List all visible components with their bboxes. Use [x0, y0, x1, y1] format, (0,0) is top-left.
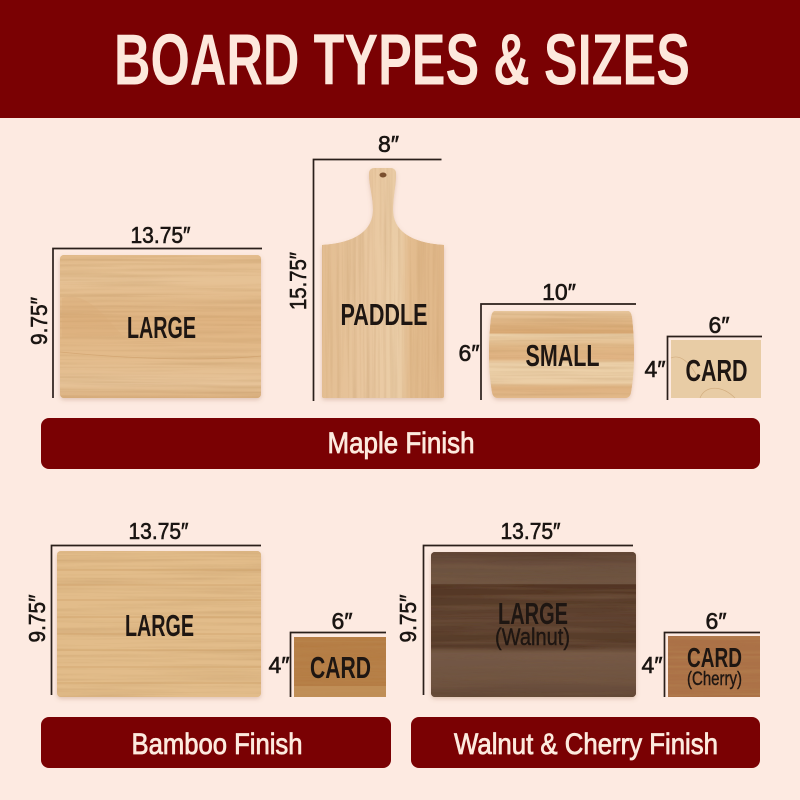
dimension: card width: 6″ — [709, 312, 729, 338]
title banner — [0, 0, 800, 118]
label: paddle: PADDLE — [340, 297, 428, 332]
board: maple small — [489, 311, 634, 398]
dimension: large width: 13.75″ — [130, 222, 190, 248]
banner: maple finish: Maple Finish — [328, 427, 474, 460]
label: card: CARD — [686, 353, 748, 388]
dimension: paddle width — [314, 131, 442, 401]
dimension: card height: 4″ — [645, 356, 665, 382]
label: large walnut: LARGE — [498, 596, 568, 631]
dimension: large height: 9.75″ — [26, 297, 52, 345]
dimension: large width: 13.75″ — [128, 518, 188, 544]
dimension: walnut width: 13.75″ — [500, 518, 560, 544]
dimension: cherry width — [664, 608, 760, 697]
dimension: paddle width: 8″ — [378, 131, 399, 157]
dimension: card width: 6″ — [332, 608, 352, 634]
dimension: paddle height: 15.75″ — [285, 252, 311, 310]
dimension: walnut height: 9.75″ — [395, 594, 421, 642]
dimension: cherry height: 4″ — [642, 652, 662, 678]
dimension: walnut width — [424, 518, 633, 695]
panel: bamboo finish boards — [24, 518, 386, 697]
dimension: small width — [481, 279, 636, 400]
label: card cherry: CARD — [687, 642, 742, 673]
panel: walnut and cherry finish boards — [395, 518, 760, 697]
dimension: card width — [668, 312, 762, 400]
dimension: card height: 4″ — [269, 652, 289, 678]
panel: maple finish boards — [26, 131, 762, 401]
label: card: CARD — [310, 650, 371, 685]
dimension: cherry width: 6″ — [706, 608, 726, 634]
banner: bamboo finish: Bamboo Finish — [132, 728, 302, 761]
board: maple card — [671, 340, 761, 398]
banner: bamboo finish — [41, 717, 391, 768]
label: large: LARGE — [125, 608, 194, 643]
board: bamboo card — [294, 637, 386, 697]
dimension: small height: 6″ — [459, 340, 479, 366]
board: walnut large — [431, 552, 636, 697]
dimension: large width — [53, 222, 262, 398]
board: bamboo large — [57, 551, 261, 697]
banner: maple finish — [41, 418, 760, 469]
dimension: small width: 10″ — [542, 279, 576, 305]
banner: walnut and cherry finish: Walnut & Cherry Finish — [454, 728, 718, 761]
banner: walnut and cherry finish — [411, 717, 760, 768]
board: cherry card — [668, 636, 760, 697]
label: large: LARGE — [127, 310, 196, 345]
label: walnut: (Walnut) — [495, 624, 570, 651]
dimension: large width — [52, 518, 261, 695]
board: paddle — [322, 168, 444, 398]
dimension: large height: 9.75″ — [24, 594, 50, 642]
label: small: SMALL — [526, 338, 600, 373]
board: maple large — [60, 255, 261, 398]
dimension: card width — [290, 608, 386, 697]
icon: hanging hole — [380, 172, 386, 178]
label: cherry: (Cherry) — [687, 669, 742, 690]
